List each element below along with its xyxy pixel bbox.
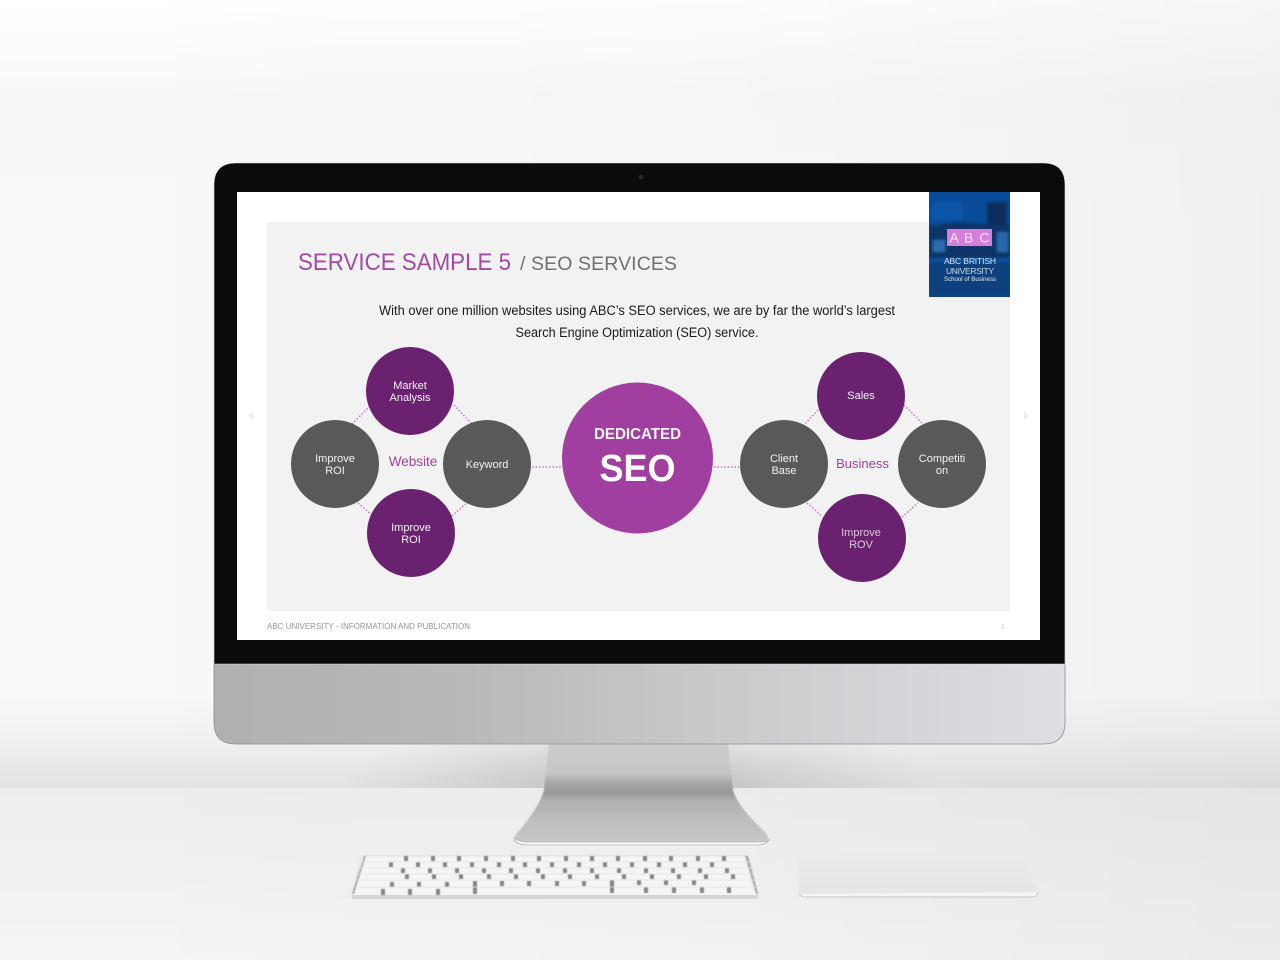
circle: client base: Client <box>770 453 798 465</box>
monitor <box>214 163 1065 744</box>
badge photo shapes <box>929 202 1010 297</box>
keyboard body <box>352 856 758 898</box>
center circle: dedicated SEO <box>562 382 713 534</box>
circle: market analysis: Analysis <box>390 392 431 404</box>
title: SERVICE SAMPLE 5 <box>298 249 511 276</box>
label: website: Website <box>389 454 437 469</box>
logo badge <box>929 192 1010 297</box>
page number: 1 <box>1001 624 1005 631</box>
intro text: With over one million websites using ABC’s SEO services, we are by far the world’s largest <box>379 303 895 318</box>
center circle: dedicated SEO: DEDICATED <box>594 426 681 443</box>
title <box>298 249 677 276</box>
monitor stand <box>514 742 770 845</box>
circle: improve ROI bottom: Improve <box>391 522 431 534</box>
trackpad <box>797 853 1038 897</box>
circle: keyword: Keyword <box>466 459 508 471</box>
circle: competition: on <box>936 465 948 477</box>
circle: keyword <box>443 420 531 508</box>
keyboard row lines <box>355 862 756 887</box>
badge ABC box <box>947 229 992 246</box>
background: desk <box>0 788 1280 960</box>
title: / SEO SERVICES <box>520 253 677 275</box>
keyboard <box>352 856 758 899</box>
connectors: website cluster <box>352 405 562 516</box>
wall shadow behind stand <box>340 640 940 788</box>
previous arrow <box>248 411 253 420</box>
badge ABC letters: A B C <box>950 230 990 246</box>
circle: improve ROI bottom: ROI <box>401 534 421 546</box>
circle: client base <box>740 420 828 508</box>
circle: market analysis <box>366 347 454 435</box>
circle: improve ROV: ROV <box>849 539 874 551</box>
circle: sales: Sales <box>847 390 875 402</box>
footer text: ABC UNIVERSITY - INFORMATION AND PUBLICATION <box>267 621 470 631</box>
badge university name: ABC BRITISH <box>944 256 996 266</box>
intro text <box>379 303 895 340</box>
keyboard side edges <box>352 856 758 894</box>
slide panel <box>267 222 1010 611</box>
badge school line: School of Business <box>944 277 996 283</box>
website cluster <box>291 347 531 577</box>
center circle: dedicated SEO: SEO <box>600 448 676 490</box>
badge university line 2: UNIVERSITY <box>946 266 994 276</box>
label: business: Business <box>836 456 889 471</box>
circle: improve ROI left <box>291 420 379 508</box>
monitor bezel <box>214 163 1065 664</box>
circle: improve ROI left: Improve <box>315 453 355 465</box>
circle: improve ROV: Improve <box>841 527 881 539</box>
next arrow <box>1024 411 1029 420</box>
slide screen <box>237 192 1040 640</box>
keyboard key gaps <box>381 856 735 895</box>
business cluster <box>740 352 986 582</box>
circle: sales <box>817 352 905 440</box>
circle: market analysis: Market <box>393 380 427 392</box>
intro text: Search Engine Optimization (SEO) service. <box>516 325 758 340</box>
circle: competition <box>898 420 986 508</box>
keyboard front edge <box>352 895 758 899</box>
circle: improve ROV <box>818 494 906 582</box>
webcam <box>639 175 643 179</box>
connectors: business cluster <box>714 405 924 517</box>
circle: improve ROI bottom <box>367 489 455 577</box>
circle: improve ROI left: ROI <box>325 465 345 477</box>
monitor chin <box>214 660 1065 744</box>
circle: client base: Base <box>771 465 797 477</box>
circle: competition: Competiti <box>919 453 965 465</box>
